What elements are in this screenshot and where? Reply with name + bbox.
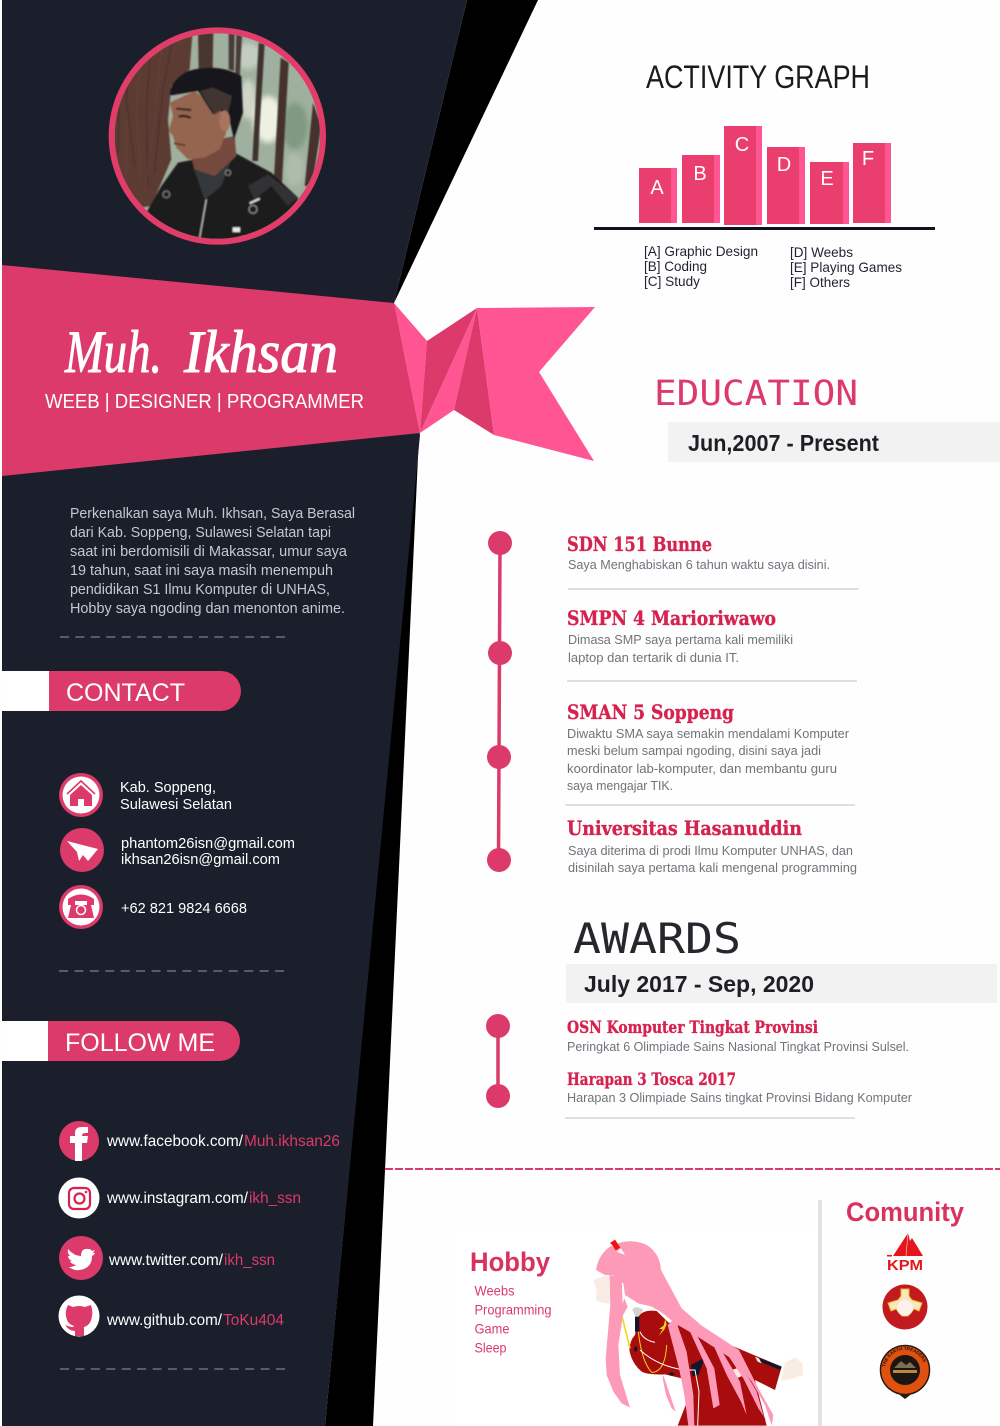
chart legend: [C] Study [644, 273, 700, 289]
contact email: ikhsan26isn@gmail.com [121, 851, 280, 868]
hobby list: Weebs [474, 1282, 514, 1298]
intro text: saat ini berdomisili di Makassar, umur saya [70, 543, 348, 560]
education date bar: Jun,2007 - Present [688, 430, 879, 456]
profile photo [108, 26, 328, 246]
github link: ToKu404 [223, 1312, 284, 1329]
entry: SMPN 4 Marioriwawo [567, 606, 793, 665]
entry: SMPN 4 Marioriwawo: Dimasa SMP saya pertama kali memiliki [568, 632, 793, 647]
facebook link [106, 1133, 340, 1150]
awards timeline [486, 1014, 510, 1108]
entry: SMAN 5 Soppeng: saya mengajar TIK. [567, 778, 673, 793]
logo: round red badge [882, 1284, 928, 1330]
black accent shapes [325, 0, 538, 1426]
award: Harapan 3: Harapan 3 Olimpiade Sains tingkat Provinsi Bidang Komputer [567, 1090, 913, 1105]
contact heading: CONTACT [66, 679, 185, 707]
entry: SDN 151 Bunne [567, 532, 830, 572]
github link [106, 1312, 284, 1329]
hobby list [474, 1282, 552, 1356]
education heading: EDUCATION [654, 374, 858, 414]
facebook link: Muh.ikhsan26 [244, 1133, 340, 1150]
hobby list: Programming [474, 1302, 552, 1318]
contact phone: +62 821 9824 6668 [121, 900, 247, 917]
contact heading [2, 671, 241, 711]
name [64, 319, 338, 385]
hobby list: Sleep [474, 1340, 507, 1356]
entry: Universitas Hasanuddin [567, 816, 857, 875]
twitter link: www.twitter.com/ [108, 1252, 224, 1269]
bar chart: F [862, 148, 874, 170]
github link: www.github.com/ [106, 1312, 223, 1329]
entry: SMAN 5 Soppeng: Diwaktu SMA saya semakin mendalami Komputer [567, 726, 850, 741]
award: OSN [567, 1018, 909, 1054]
award: Harapan 3 [567, 1070, 913, 1105]
chart legend: [D] Weebs [790, 244, 853, 260]
icon: telephone [59, 885, 103, 929]
entry: SMAN 5 Soppeng [567, 700, 850, 793]
intro text: pendidikan S1 Ilmu Komputer di UNHAS, [70, 581, 330, 598]
icon: github [58, 1296, 100, 1336]
award: OSN: OSN Komputer Tingkat Provinsi [567, 1018, 818, 1038]
logo: The Earth Treaders badge: THE EARTH TREADERS [882, 1346, 926, 1366]
bar chart: D [777, 154, 791, 176]
tagline: WEEB | DESIGNER | PROGRAMMER [45, 391, 364, 413]
hobby list: Game [474, 1320, 510, 1336]
icon: paper plane [60, 828, 104, 872]
entry: SMAN 5 Soppeng: meski belum sampai ngoding, disini saya jadi [567, 743, 821, 758]
icon: twitter [59, 1236, 103, 1280]
awards date bar [566, 964, 997, 1003]
instagram link: www.instagram.com/ [106, 1190, 249, 1207]
entry: Universitas Hasanuddin: disinilah saya pertama kali mengenal programming [568, 860, 857, 875]
intro text: Perkenalkan saya Muh. Ikhsan, Saya Berasal [70, 505, 355, 522]
chart legend: [E] Playing Games [790, 259, 902, 275]
intro text [70, 505, 355, 617]
follow me heading [2, 1021, 240, 1061]
bar chart: C [735, 134, 749, 156]
logo: KPM: KPM [887, 1257, 923, 1274]
activity graph title: ACTIVITY GRAPH [646, 59, 870, 95]
contact address: Kab. Soppeng, [120, 779, 216, 796]
hobby panel [455, 1228, 815, 1426]
community heading: Comunity [846, 1197, 964, 1227]
icon: instagram [58, 1178, 100, 1218]
entry: Universitas Hasanuddin: Saya diterima di prodi Ilmu Komputer UNHAS, dan [568, 843, 853, 858]
name: Ikhsan [183, 319, 338, 385]
chart legend: [F] Others [790, 274, 850, 290]
hobby heading: Hobby [470, 1247, 550, 1277]
entry: SMAN 5 Soppeng: SMAN 5 Soppeng [567, 700, 734, 724]
entry: SMPN 4 Marioriwawo: laptop dan tertarik di dunia IT. [568, 650, 739, 665]
instagram link: ikh_ssn [249, 1190, 301, 1207]
dark sidebar panel [2, 0, 467, 1426]
anime character illustration [593, 1240, 803, 1426]
follow me heading: FOLLOW ME [65, 1029, 215, 1057]
education date bar [668, 422, 1000, 462]
entry: SMPN 4 Marioriwawo: SMPN 4 Marioriwawo [567, 606, 776, 630]
contact email: phantom26isn@gmail.com [121, 835, 295, 852]
contact address: Sulawesi Selatan [120, 796, 232, 813]
icon: facebook [59, 1121, 99, 1161]
intro text: dari Kab. Soppeng, Sulawesi Selatan tapi [70, 524, 331, 541]
entry: SDN 151 Bunne: Saya Menghabiskan 6 tahun waktu saya disini. [568, 557, 830, 572]
contact address [120, 779, 232, 813]
entry: SDN 151 Bunne: SDN 151 Bunne [567, 532, 712, 556]
ribbon banner [2, 265, 595, 476]
chart legend: [A] Graphic Design [644, 243, 758, 259]
entry: Universitas Hasanuddin: Universitas Hasanuddin [567, 816, 802, 840]
name: Muh. [64, 319, 162, 385]
twitter link: ikh_ssn [224, 1252, 275, 1269]
bar chart [594, 126, 935, 230]
education timeline [487, 531, 512, 872]
award: OSN: Peringkat 6 Olimpiade Sains Nasional Tingkat Provinsi Sulsel. [567, 1039, 909, 1054]
awards date bar: July 2017 - Sep, 2020 [584, 971, 814, 997]
facebook link: www.facebook.com/ [106, 1133, 244, 1150]
contact email [121, 835, 295, 868]
bar chart: E [820, 168, 834, 190]
chart legend [644, 243, 902, 290]
icon: home [59, 773, 103, 817]
bar chart: A [650, 177, 664, 199]
awards heading: AWARDS [573, 914, 741, 963]
intro text: Hobby saya ngoding dan menonton anime. [70, 600, 345, 617]
logo: KPM [887, 1233, 923, 1274]
award: Harapan 3: Harapan 3 Tosca 2017 [567, 1070, 736, 1090]
chart legend: [B] Coding [644, 258, 707, 274]
bar chart: B [693, 163, 707, 185]
logo: The Earth Treaders badge [880, 1344, 930, 1399]
entry: SMAN 5 Soppeng: koordinator lab-komputer, dan membantu guru [567, 761, 837, 776]
intro text: 19 tahun, saat ini saya masih menempuh [70, 562, 333, 579]
